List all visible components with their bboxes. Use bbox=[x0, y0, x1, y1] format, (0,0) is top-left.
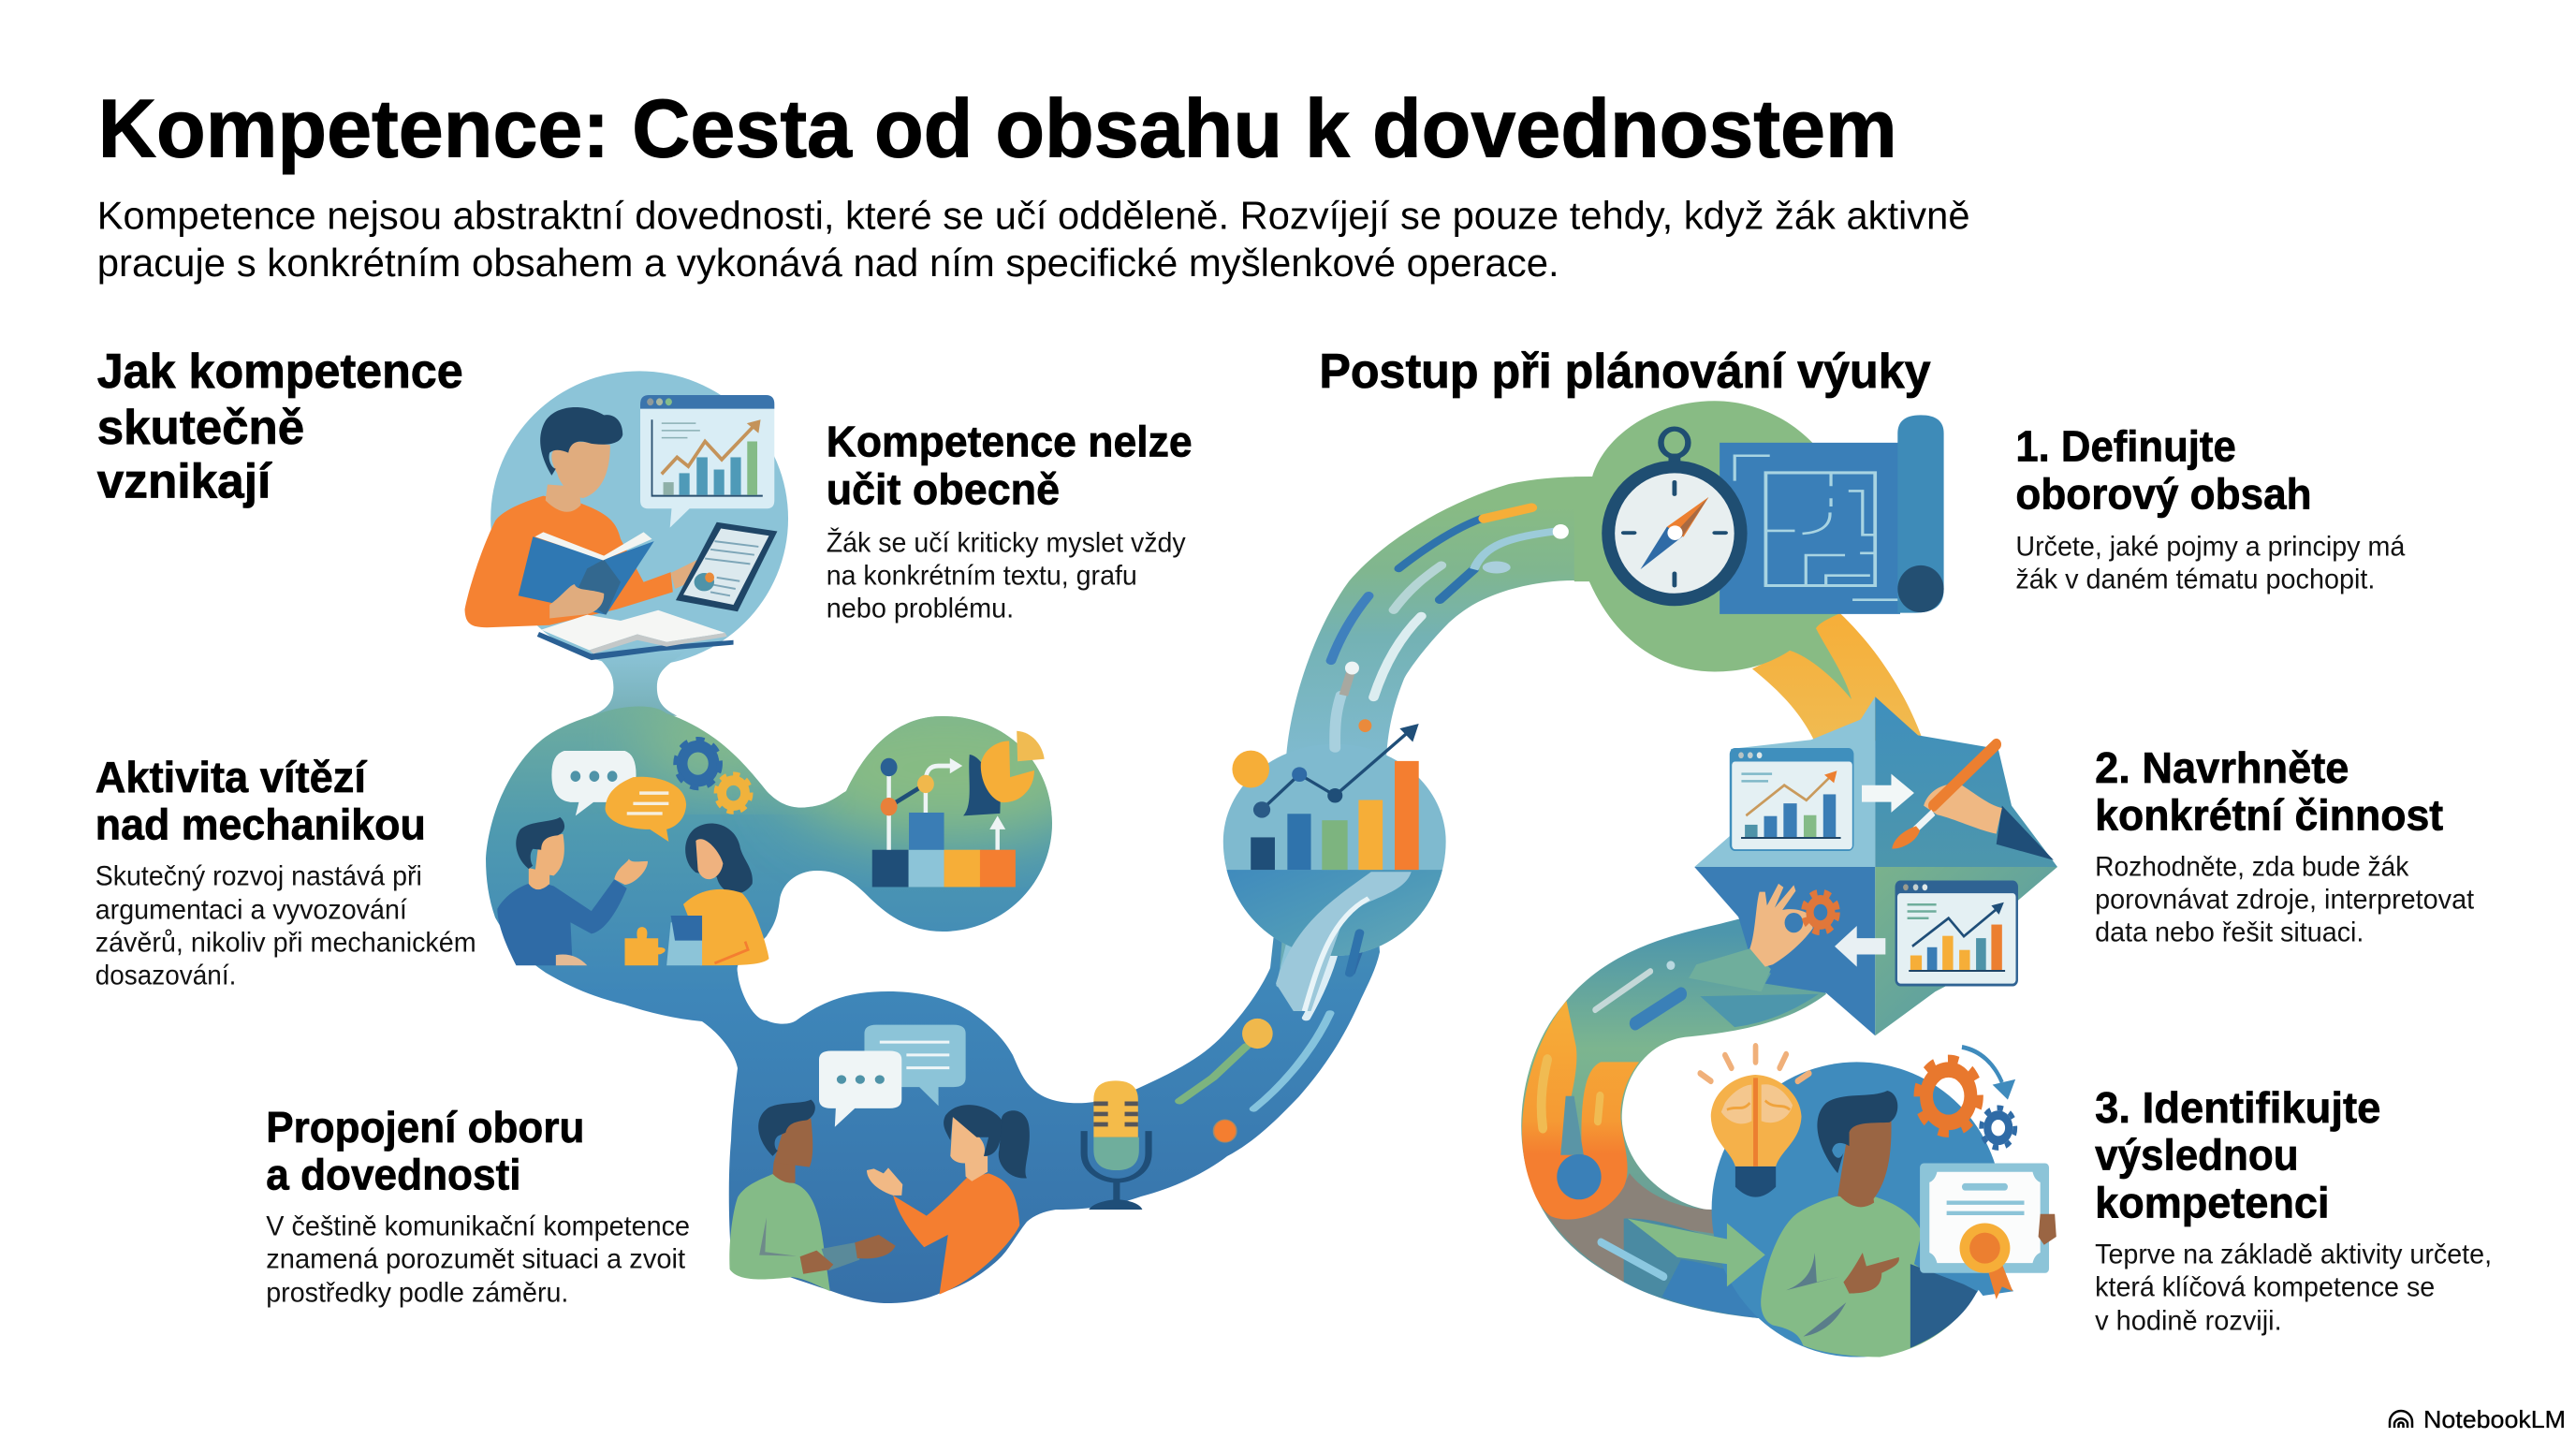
gears and cycle arrow bbox=[1917, 1047, 2015, 1148]
illustration: orange and yellow connector bbox=[1752, 613, 1923, 741]
illustration: blocks, nodes and puzzle pie bbox=[872, 731, 1045, 887]
text block: step 2: Rozhodněte, zda bude žák bbox=[2095, 852, 2408, 883]
man bbox=[497, 817, 648, 965]
green blob bbox=[1574, 401, 1852, 699]
subtitle: pracuje s konkrétním obsahem a vykonává nad ním specifické myšlenkové operace. bbox=[97, 241, 1559, 285]
illustration: four-part star of activities bbox=[1521, 697, 2057, 1318]
open book held bbox=[519, 532, 704, 619]
bars and trend line bbox=[1232, 724, 1419, 870]
student figure bbox=[465, 407, 673, 627]
text block: step 3 bbox=[2095, 1083, 2492, 1336]
text block: Aktivita vítězí nad mechanikou: závěrů, nikoliv při mechanickém bbox=[95, 927, 476, 958]
woman bbox=[624, 824, 768, 965]
text block: step 1: Určete, jaké pojmy a principy má bbox=[2015, 531, 2406, 562]
text block: step 1: 1. Definujte bbox=[2015, 422, 2236, 471]
text block: Propojení oboru a dovednosti: a dovednosti bbox=[266, 1151, 521, 1199]
blob: main flowing band through left and centre bbox=[486, 706, 1380, 1303]
text block: step 2: data nebo řešit situaci. bbox=[2095, 917, 2364, 947]
illustration: two students discussing bbox=[497, 740, 768, 965]
text block: Propojení oboru a dovednosti: prostředky podle záměru. bbox=[266, 1277, 568, 1308]
text block: Kompetence nelze učit obecně bbox=[827, 418, 1193, 624]
text block: Propojení oboru a dovednosti: V češtině komunikační kompetence bbox=[266, 1211, 690, 1242]
text block: Aktivita vítězí nad mechanikou: nad mechanikou bbox=[95, 800, 426, 849]
block steps bbox=[872, 813, 1016, 887]
text block: Propojení oboru a dovednosti bbox=[266, 1103, 690, 1308]
text block: step 2 bbox=[2095, 743, 2475, 947]
blob bbox=[1712, 1062, 2002, 1357]
compass bbox=[1602, 429, 1748, 606]
microphone bbox=[1084, 1080, 1149, 1210]
text block: step 3: výslednou bbox=[2095, 1131, 2299, 1180]
hand with gear bbox=[1689, 884, 1837, 991]
blueprint bbox=[1720, 415, 1944, 614]
arrow left bbox=[1835, 926, 1885, 967]
heading: Postup při plánování výuky: Postup při plánování výuky bbox=[1319, 344, 1931, 398]
text block: step 2: 2. Navrhněte bbox=[2095, 743, 2349, 792]
text block: step 1 bbox=[2015, 422, 2406, 594]
illustration: compass and blueprint blob bbox=[1574, 401, 1944, 699]
star quadrants bbox=[1694, 697, 2057, 1035]
text block: Propojení oboru a dovednosti: Propojení oboru bbox=[266, 1103, 584, 1152]
open book at base bbox=[537, 610, 734, 660]
speech bubbles bbox=[819, 1025, 966, 1127]
pie and speech shape bbox=[963, 731, 1045, 815]
illustration: student with book, chart and tablet bbox=[465, 395, 777, 660]
chart window one bbox=[1730, 748, 1853, 851]
heading: Jak kompetence skutečně vznikají: Jak kompetence bbox=[97, 344, 463, 398]
text block: Aktivita vítězí nad mechanikou: dosazování. bbox=[95, 960, 236, 990]
panel: left flowing path background bbox=[468, 371, 1404, 1329]
brain bulb bbox=[1700, 1046, 1809, 1197]
path marks bbox=[1179, 936, 1364, 1142]
heading: Jak kompetence skutečně vznikají: skutečně bbox=[97, 400, 304, 454]
text block: Aktivita vítězí nad mechanikou: Skutečný rozvoj nastává při bbox=[95, 861, 422, 892]
arrow right bbox=[1862, 774, 1914, 813]
chart circle bbox=[1218, 744, 1454, 1011]
blob: top reader circle bbox=[490, 371, 788, 716]
speech bubbles bbox=[551, 751, 686, 842]
subtitle: Kompetence nejsou abstraktní dovednosti, které se učí odděleně. Rozvíjejí se pouze tehdy, když žák aktivně bbox=[97, 193, 1970, 237]
man in green bbox=[729, 1100, 896, 1291]
text block: step 1: oborový obsah bbox=[2015, 470, 2312, 519]
gears bbox=[676, 740, 751, 812]
title: Kompetence: Cesta od obsahu k dovednostem bbox=[98, 83, 1897, 175]
heading: Jak kompetence skutečně vznikají: vznikají bbox=[97, 454, 272, 508]
illustration: learner with brain bulb, gears and certificate bbox=[1628, 1046, 2056, 1357]
woman in orange bbox=[867, 1105, 1030, 1295]
text block: Kompetence nelze učit obecně: Žák se učí kriticky myslet vždy bbox=[827, 527, 1186, 558]
hand with brush bbox=[1892, 744, 2054, 860]
text block: Aktivita vítězí nad mechanikou bbox=[95, 753, 476, 990]
subtitle bbox=[97, 193, 1970, 285]
text block: Aktivita vítězí nad mechanikou: Aktivita vítězí bbox=[95, 753, 367, 801]
text block: step 3: 3. Identifikujte bbox=[2095, 1083, 2380, 1132]
panel: upper flowing band bbox=[1286, 477, 1596, 758]
chart window two bbox=[1895, 881, 2018, 986]
text block: step 1: žák v daném tématu pochopit. bbox=[2015, 564, 2375, 594]
text block: step 3: kompetenci bbox=[2095, 1179, 2330, 1227]
text block: Propojení oboru a dovednosti: znamená porozumět situaci a zvoit bbox=[266, 1243, 686, 1274]
connecting nodes and arrows bbox=[881, 758, 1005, 850]
illustration: rising chart circle bbox=[1218, 507, 1569, 1011]
path marks bbox=[1331, 507, 1569, 748]
text block: Kompetence nelze učit obecně: nebo problému. bbox=[827, 593, 1014, 624]
text block: Aktivita vítězí nad mechanikou: argumentaci a vyvozování bbox=[95, 894, 408, 925]
chart speech bubble bbox=[640, 395, 774, 528]
logo: NotebookLM: NotebookLM bbox=[2423, 1405, 2566, 1433]
text block: step 2: porovnávat zdroje, interpretovat bbox=[2095, 884, 2475, 915]
green arrow bbox=[1628, 1219, 1765, 1286]
S-shaped band behind star bbox=[1521, 919, 1826, 1318]
heading: Jak kompetence skutečně vznikají bbox=[97, 344, 463, 508]
tablet bbox=[676, 522, 777, 611]
text block: Kompetence nelze učit obecně: na konkrétním textu, grafu bbox=[827, 560, 1137, 591]
illustration: conversation and microphone bbox=[729, 936, 1364, 1295]
text block: step 3: v hodině rozviji. bbox=[2095, 1305, 2282, 1336]
text block: Kompetence nelze učit obecně: Kompetence nelze bbox=[827, 418, 1193, 466]
text block: step 2: konkrétní činnost bbox=[2095, 791, 2443, 840]
text block: step 3: která klíčová kompetence se bbox=[2095, 1271, 2435, 1302]
person bbox=[1761, 1091, 1977, 1357]
text block: Kompetence nelze učit obecně: učit obecně bbox=[827, 465, 1060, 514]
certificate bbox=[1920, 1164, 2056, 1299]
text block: step 3: Teprve na základě aktivity určete, bbox=[2095, 1239, 2492, 1269]
